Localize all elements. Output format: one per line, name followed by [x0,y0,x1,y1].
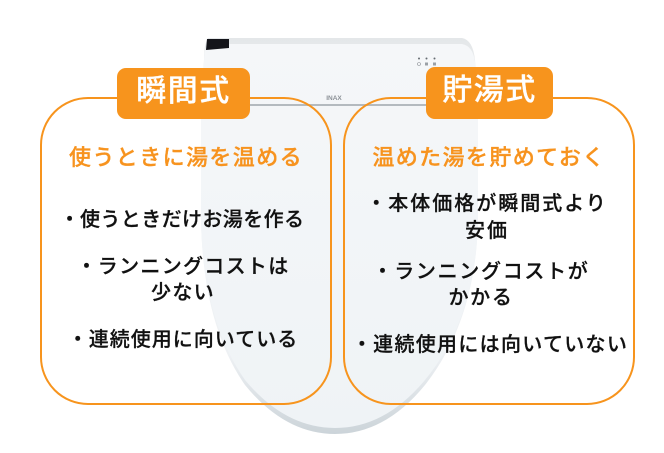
text: left bullet 3: ・連続使用に向いている [68,329,298,351]
text: right bullet 1: 安価 [465,220,509,242]
text: left bullet 2 [76,256,290,304]
heading tag: 瞬間式 [117,68,250,119]
heading tag: 貯湯式: 貯湯式 [442,74,537,107]
text: left bullet 2: 少ない [151,282,215,304]
text: left bullet 1: ・使うときだけお湯を作る [60,209,304,231]
illustration: toilet seat: INAX [326,95,342,102]
subheading: right: 温めた湯を貯めておく [372,145,606,170]
panel: 貯湯式 [343,97,635,405]
heading tag: 貯湯式 [426,67,553,119]
text: right bullet 2: かかる [448,287,514,309]
text: right bullet 1 [366,192,608,242]
subheading: left: 使うときに湯を温める [69,145,303,170]
panel: 瞬間式 [40,97,332,405]
text: right bullet 2: ・ランニングコストが [372,261,590,283]
text: right bullet 1: ・本体価格が瞬間式より [366,193,608,215]
heading tag: 瞬間式: 瞬間式 [136,75,231,108]
text: right bullet 2 [372,260,590,309]
text: left bullet 2: ・ランニングコストは [76,256,290,278]
text: right bullet 3: ・連続使用には向いていない [352,334,628,356]
